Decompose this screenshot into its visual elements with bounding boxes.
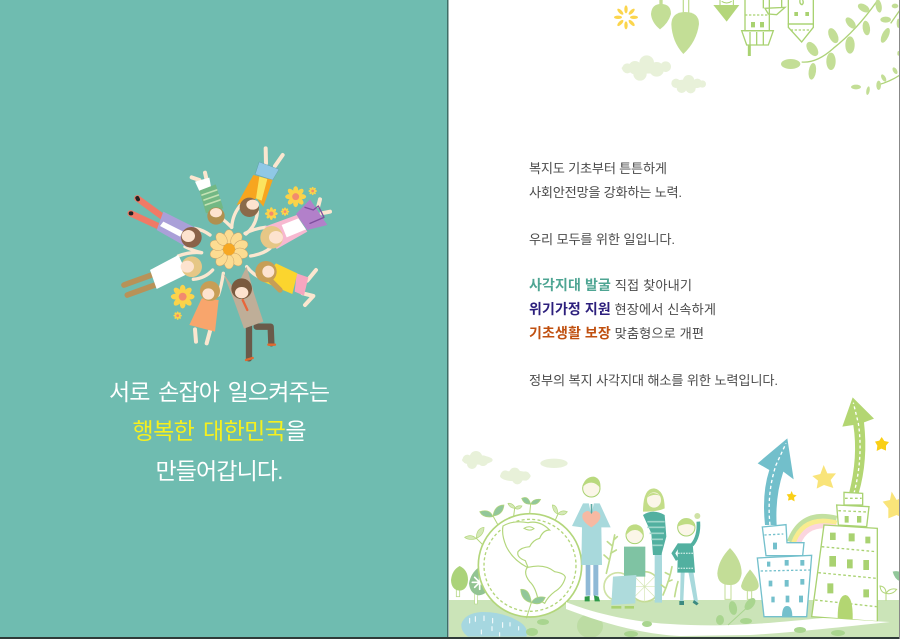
icon: clouds [462,451,568,484]
icon: triangle lantern [713,0,739,22]
icon: green arrow [842,397,874,493]
icon: rainbow [789,516,837,543]
text block: welfare message [529,161,778,388]
icon: center daisy [209,230,249,269]
illustration: ground strip [449,600,899,638]
person: caregiver [643,488,666,603]
icon: globe [478,514,582,617]
icon: blue arrow [758,438,794,525]
icon: outlined houses [742,0,813,56]
text: intro lines [529,161,682,247]
icon: right sprout [880,571,900,601]
text: intro lines: 우리 모두를 위한 일입니다. [529,232,675,247]
illustration: child, buildings, arrows and stars [673,397,900,622]
illustration: top hanging decorations [614,0,900,95]
icon: blue building [757,525,812,617]
text: coloured key points: 기초생활 보장 맞춤형으로 개편 [529,325,704,341]
icon: yellow burst [614,5,638,29]
illustration: people holding hands in a circle [124,148,330,360]
icon: hanging teardrops [651,0,699,54]
divider spine [447,0,448,639]
icon: small trees [451,566,490,604]
person: green stripes [192,173,225,225]
page edges [0,637,900,639]
heading: left page message: 행복한 대한민국을 [132,418,306,444]
text: coloured key points [529,277,716,341]
person: wheelchair user [604,524,660,609]
person: doctor with heart [572,477,611,601]
person: waving child [673,513,700,605]
person: white coat [124,255,202,295]
icon: stars [787,437,900,518]
icon: pond [461,612,527,637]
person: orange polka dress [189,281,220,343]
text: coloured key points: 사각지대 발굴 직접 찾아내기 [529,277,692,293]
person: man in suit [223,267,275,360]
text: closing line: 정부의 복지 사각지대 해소를 위한 노력입니다. [529,373,778,388]
panel: teal left page [0,0,447,639]
arms [178,204,270,295]
heading: left page message [109,379,330,484]
icon: fern plants [604,535,678,597]
icon: small flowers [171,186,317,320]
icon: trees [717,548,759,599]
icon: pale clouds [622,55,706,93]
heading: left page message: 서로 손잡아 일으켜주는 [109,379,330,405]
person: yellow top [255,261,316,305]
person: purple jacket [131,198,202,248]
icon: green building [812,492,877,622]
person: orange dress [237,148,283,217]
text: intro lines: 사회안전망을 강화하는 노력. [529,185,682,200]
person: pink jacket [260,199,330,249]
illustration: globe, people and trees [451,451,678,637]
icon: sprouts on globe [465,497,567,618]
heading: left page message: 만들어갑니다. [156,458,284,484]
illustration: white path and ground leaves [526,596,890,637]
icon: leafy branches [781,0,900,95]
text: coloured key points: 위기가정 지원 현장에서 신속하게 [529,301,716,317]
text: intro lines: 복지도 기초부터 튼튼하게 [529,161,667,176]
